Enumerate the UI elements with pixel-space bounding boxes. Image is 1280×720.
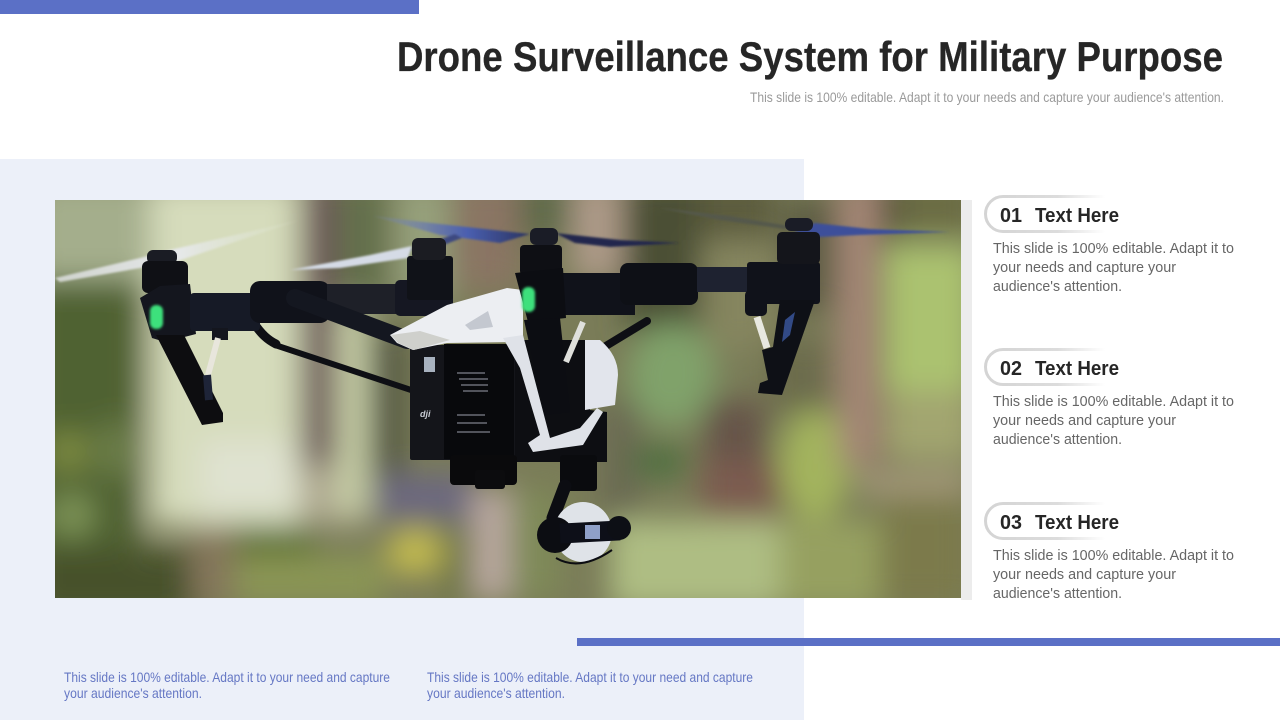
item 1 text: your needs and capture your: [993, 260, 1176, 276]
bottom note left: [64, 669, 390, 701]
centre green LED: [522, 287, 535, 312]
item 3 text: audience's attention.: [993, 586, 1122, 602]
photo shadow: [961, 200, 972, 600]
drone: [55, 208, 950, 563]
item 3 heading: 03: [1000, 512, 1022, 534]
right arm: [560, 218, 820, 395]
item 3 text: your needs and capture your: [993, 567, 1176, 583]
lower rods: [253, 321, 647, 395]
propeller blades: [55, 208, 950, 282]
item 3: [986, 504, 1234, 602]
item 3 text: This slide is 100% editable. Adapt it to: [993, 548, 1234, 564]
left leg white strut: [208, 338, 218, 375]
item 1 text: [993, 241, 1234, 295]
item 1 text: This slide is 100% editable. Adapt it to: [993, 241, 1234, 257]
dark machinery behind frame: [510, 340, 607, 462]
white frame: [503, 335, 603, 452]
item 2 heading: Text Here: [1035, 358, 1119, 380]
left arm: [140, 238, 453, 425]
gimbal housing: [585, 340, 618, 410]
item 1 heading: 01: [1000, 205, 1022, 227]
item 1 text: audience's attention.: [993, 279, 1122, 295]
item 2 pill outline: [986, 350, 1105, 384]
item 2 heading: 02: [1000, 358, 1022, 380]
item 3 text: [993, 548, 1234, 602]
centre arm: [515, 228, 597, 491]
item 2 text: This slide is 100% editable. Adapt it to: [993, 394, 1234, 410]
bottom note right: your audience's attention.: [427, 685, 565, 701]
right leg white strut: [757, 317, 767, 348]
camera gimbal: [537, 486, 631, 563]
white shell: [390, 288, 523, 350]
photo: drone in flight over blurred forest: [55, 200, 961, 598]
top accent bar: [0, 0, 419, 14]
item 1 pill outline: [986, 196, 1105, 232]
item 2 text: audience's attention.: [993, 432, 1122, 448]
item 2: [986, 350, 1234, 448]
left landing leg: [156, 335, 223, 425]
bottom note right: This slide is 100% editable. Adapt it to your need and capture: [427, 669, 753, 685]
battery and body block: dji: [420, 409, 431, 419]
bottom note left: your audience's attention.: [64, 685, 202, 701]
item 3 pill outline: [986, 504, 1105, 538]
item 2 text: your needs and capture your: [993, 413, 1176, 429]
panel: pale blue background: [0, 159, 804, 720]
left green LED: [150, 305, 163, 329]
white strut: [566, 322, 583, 362]
right landing leg: [758, 300, 815, 395]
item 1: [986, 196, 1234, 295]
item 2 text: [993, 394, 1234, 448]
bottom accent bar: [577, 638, 1280, 646]
bottom note left: This slide is 100% editable. Adapt it to your need and capture: [64, 669, 390, 685]
blurred forest background: [55, 200, 961, 598]
item 3 heading: Text Here: [1035, 512, 1119, 534]
bottom note right: [427, 669, 753, 701]
battery and body block: [410, 344, 517, 489]
item 1 heading: Text Here: [1035, 205, 1119, 227]
